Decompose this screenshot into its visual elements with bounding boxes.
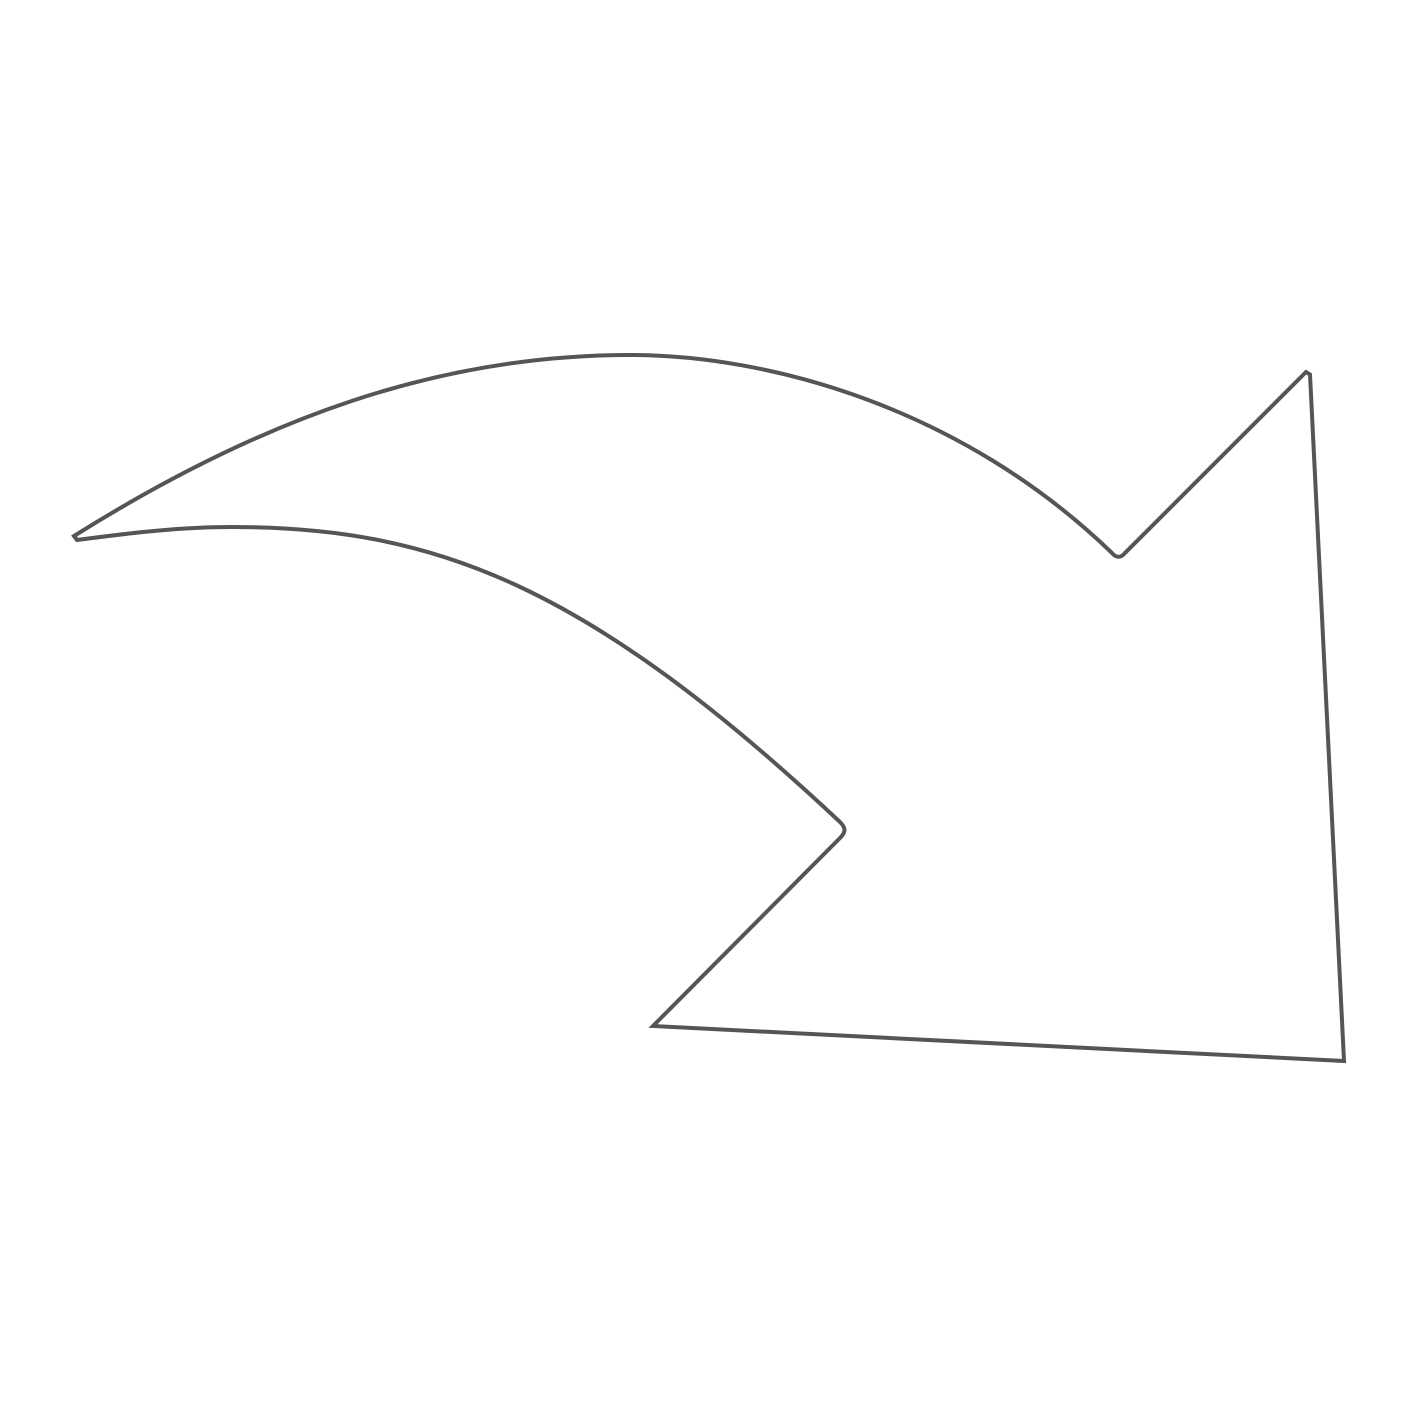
icon: curved arrow outline (74, 355, 1344, 1061)
